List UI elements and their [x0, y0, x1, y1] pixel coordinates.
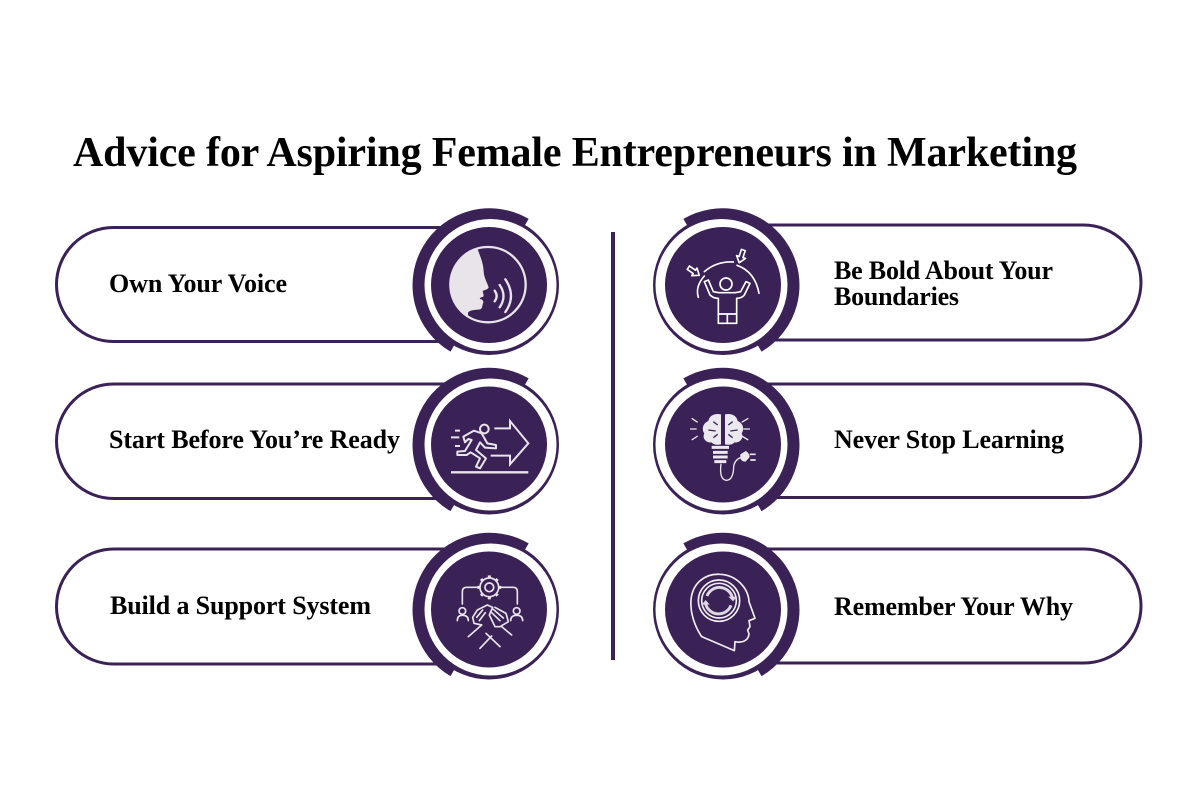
panel: never stop learning	[653, 374, 1141, 514]
icon: person pushing a boundary	[686, 249, 759, 323]
badge	[653, 214, 793, 355]
icon: head with cycle arrows	[691, 574, 755, 651]
label: Start Before You’re Ready	[109, 425, 400, 454]
icon: speaking face	[450, 247, 526, 322]
badge	[419, 214, 559, 355]
panel: be bold about your boundaries	[653, 214, 1141, 355]
panel: build a support system	[56, 539, 559, 680]
pill outline	[57, 384, 489, 498]
pill outline	[723, 384, 1141, 498]
panel: own your voice	[56, 214, 559, 355]
label: Own Your Voice	[109, 269, 287, 298]
label	[834, 256, 1053, 311]
pill outline	[723, 225, 1141, 340]
badge	[653, 539, 793, 680]
icon: brain light bulb with plug	[690, 414, 756, 480]
vertical divider	[611, 232, 615, 660]
icon: running person and arrow	[451, 421, 528, 472]
pill outline	[56, 228, 489, 342]
badge	[419, 374, 559, 514]
label: Remember Your Why	[834, 592, 1073, 621]
pill outline	[56, 549, 489, 664]
label: Be Bold About Your	[834, 256, 1053, 285]
label: Build a Support System	[110, 591, 371, 620]
label: Never Stop Learning	[834, 425, 1064, 454]
title: Advice for Aspiring Female Entrepreneurs in Marketing	[73, 130, 1077, 176]
label: Boundaries	[834, 282, 959, 311]
panel: start before you're ready	[57, 374, 559, 514]
pill outline	[723, 549, 1141, 663]
panel: remember your why	[653, 539, 1141, 680]
badge	[419, 539, 559, 680]
badge	[653, 374, 793, 514]
icon: handshake with gear and people	[457, 575, 523, 648]
